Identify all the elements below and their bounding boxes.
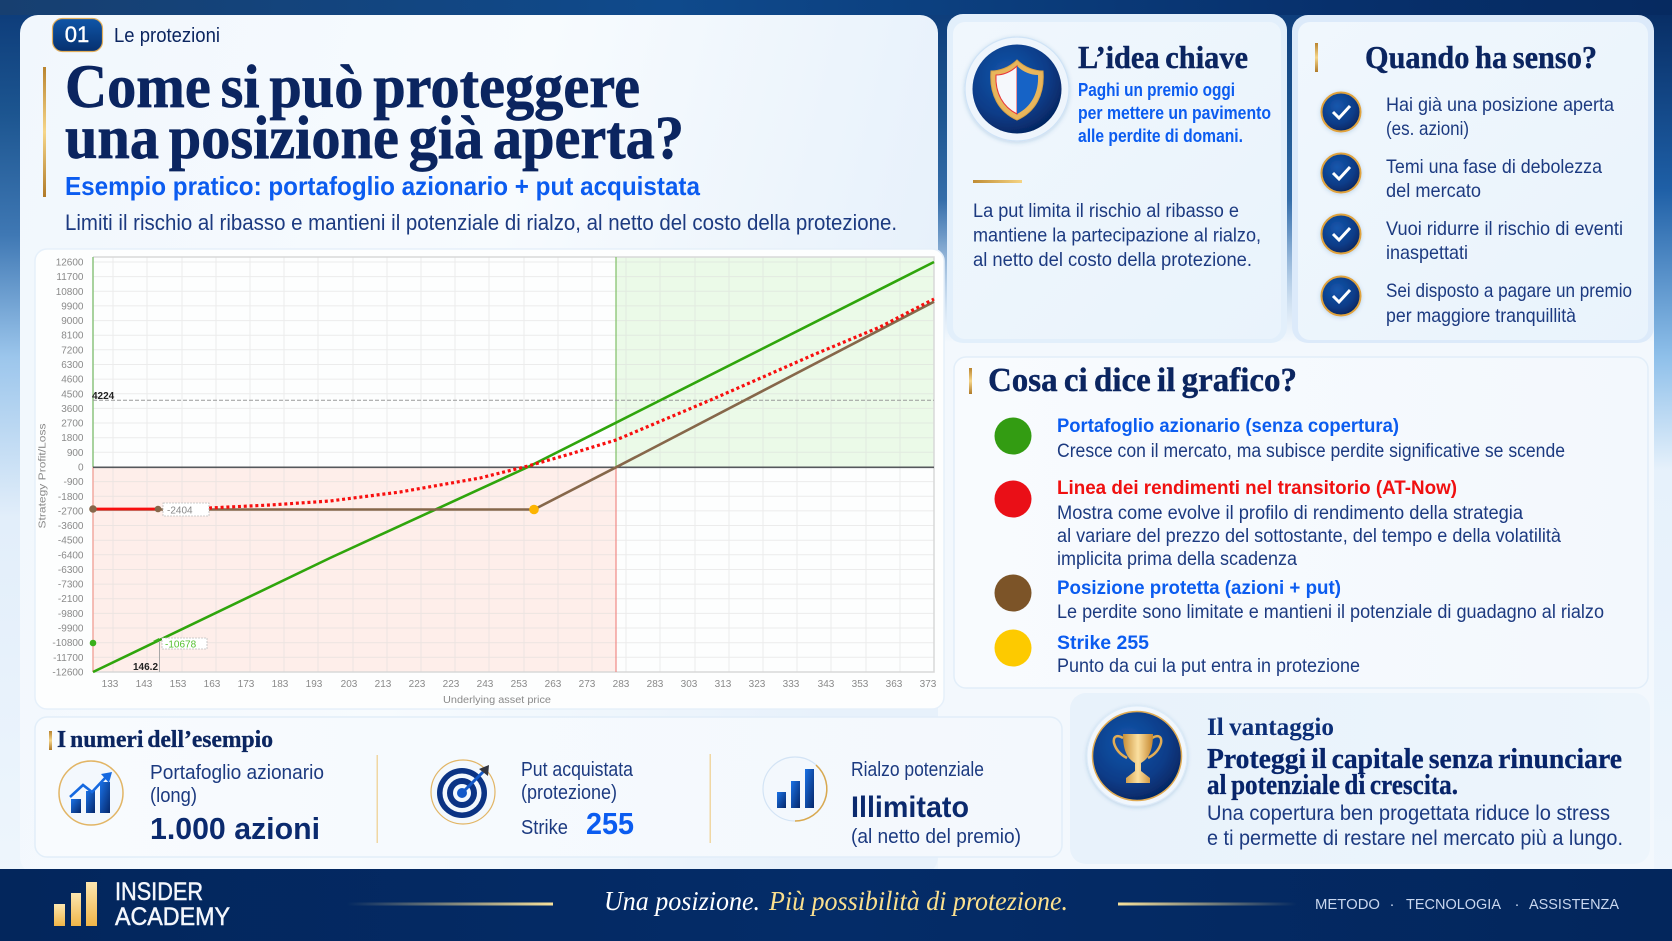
x axis labels: 223 (443, 679, 460, 690)
key message: Paghi un premio oggi (1078, 80, 1235, 100)
marker dots and cursor (89, 505, 161, 672)
x axis labels: 143 (136, 679, 153, 690)
item 2 (1322, 154, 1602, 202)
y axis labels: 1800 (61, 433, 84, 444)
item 4: per maggiore tranquillità (1386, 305, 1576, 327)
footer band (0, 869, 1672, 941)
panel: key idea (947, 14, 1287, 343)
legend: portfolio: Portafoglio azionario (senza copertura) (1057, 415, 1399, 437)
stat: portfolio: Portafoglio azionario (150, 762, 324, 784)
stat: put (521, 759, 634, 841)
x axis labels: 183 (272, 679, 289, 690)
stat: upside: Rialzo potenziale (851, 759, 984, 781)
strike marker (529, 505, 539, 514)
stat: portfolio: (long) (150, 785, 197, 807)
section badge (52, 18, 102, 52)
y axis labels: -2100 (58, 594, 84, 605)
y axis labels: 10800 (56, 287, 84, 298)
profit zone shading (616, 257, 934, 467)
x axis labels: 353 (852, 679, 869, 690)
footer values: · (1514, 896, 1520, 913)
icon: target (431, 760, 495, 824)
explanation: mantiene la partecipazione al rialzo, (973, 226, 1261, 246)
y axis labels: -3600 (58, 521, 84, 532)
legend: protected position (994, 574, 1604, 623)
stat: put: (protezione) (521, 782, 617, 804)
item 3 (1322, 214, 1623, 264)
y axis title: Strategy Profit/Loss (38, 424, 48, 528)
headline message: Proteggi il capitale senza rinunciare (1207, 743, 1622, 775)
logo: ACADEMY (115, 903, 230, 931)
heading: L’idea chiave (1078, 39, 1248, 75)
key message (1078, 80, 1271, 146)
divider (376, 755, 378, 843)
y axis labels: 4600 (61, 375, 84, 386)
panel: hero header (20, 15, 938, 875)
icon: shield (965, 37, 1069, 141)
heading: I numeri dell’esempio (57, 727, 273, 753)
item 4 (1322, 276, 1632, 327)
section label: Le protezioni (114, 25, 220, 47)
x axis labels: 343 (818, 679, 835, 690)
y axis labels: -6300 (58, 565, 84, 576)
stat: put: 255 (586, 806, 634, 841)
x axis labels: 133 (102, 679, 119, 690)
item 2: Temi una fase di debolezza (1386, 156, 1602, 178)
stat: upside (851, 759, 1021, 848)
x axis labels: 163 (204, 679, 221, 690)
y axis labels: -4500 (58, 536, 84, 547)
title: Come si può proteggere (65, 54, 640, 121)
item 4: Sei disposto a pagare un premio (1386, 280, 1632, 302)
legend: portfolio (994, 415, 1565, 462)
value tag: stock (162, 638, 207, 650)
item 2: del mercato (1386, 180, 1481, 202)
y axis labels: 8100 (61, 331, 84, 342)
y axis labels: -2700 (58, 506, 84, 517)
annotation: 4224: 4224 (92, 391, 115, 402)
y axis labels: 0 (78, 462, 84, 474)
x axis labels: 203 (341, 679, 358, 690)
divider (710, 754, 711, 843)
legend: strike: Punto da cui la put entra in protezione (1057, 656, 1360, 677)
y axis labels: 6300 (61, 360, 84, 371)
x axis labels: 243 (477, 679, 494, 690)
logo: INSIDER (115, 878, 203, 906)
footer values: ASSISTENZA (1529, 896, 1619, 913)
line: stock portfolio (93, 262, 934, 672)
supporting text (1207, 802, 1623, 850)
x axis title: Underlying asset price (443, 695, 551, 706)
headline message: al potenziale di crescita. (1207, 769, 1458, 801)
tagline: Una posizione. (604, 886, 760, 916)
x axis labels: 173 (238, 679, 255, 690)
y axis labels: -7300 (58, 580, 84, 591)
x axis labels: 323 (749, 679, 766, 690)
legend: protected position: Posizione protetta (azioni + put) (1057, 577, 1341, 599)
legend: portfolio: Cresce con il mercato, ma subisce perdite significative se scende (1057, 441, 1565, 462)
legend: AT-Now (994, 477, 1561, 570)
y axis labels: -11700 (53, 653, 84, 664)
y axis labels: -10800 (52, 638, 84, 649)
logo (54, 878, 230, 931)
title: una posizione già aperta? (65, 105, 684, 172)
stat: put: Put acquistata (521, 759, 634, 781)
heading: Il vantaggio (1207, 714, 1334, 741)
y axis labels: 9900 (61, 301, 84, 312)
item 3: Vuoi ridurre il rischio di eventi (1386, 218, 1623, 240)
value tag: stock: -10678 (165, 640, 197, 650)
legend: strike: Strike 255 (1057, 632, 1149, 654)
y axis labels: -9800 (58, 609, 84, 620)
x axis labels: 333 (783, 679, 800, 690)
legend: AT-Now: implicita prima della scadenza (1057, 549, 1297, 570)
annotation: 146.2: 146.2 (133, 662, 158, 673)
headline message (1207, 743, 1622, 801)
tagline (604, 886, 1068, 916)
item 1 (1322, 92, 1614, 140)
heading: Cosa ci dice il grafico? (988, 362, 1297, 399)
x axis labels (102, 679, 937, 690)
item 1: (es. azioni) (1386, 118, 1469, 140)
key message: alle perdite di domani. (1078, 126, 1243, 146)
x axis labels: 313 (715, 679, 732, 690)
title accent bar (43, 67, 46, 197)
key message: per mettere un pavimento (1078, 103, 1271, 123)
y axis labels: 4500 (61, 389, 84, 400)
tagline right rule (1118, 902, 1297, 906)
tagline: Più possibilità di protezione. (768, 886, 1068, 916)
stat: upside: (al netto del premio) (851, 826, 1021, 848)
accent bar (49, 731, 52, 750)
stat: portfolio (150, 762, 324, 846)
x axis labels: 283 (613, 679, 630, 690)
panel: payoff chart (35, 249, 944, 709)
icon: trophy (1087, 706, 1187, 806)
panel: chart legend (954, 357, 1648, 688)
explanation: La put limita il rischio al ribasso e (973, 201, 1239, 222)
x axis labels: 223 (409, 679, 426, 690)
item 1: Hai già una posizione aperta (1386, 94, 1614, 116)
y axis labels: -1800 (58, 492, 84, 503)
loss zone shading (93, 467, 616, 672)
section badge: 01 (65, 22, 89, 47)
icon: bars (763, 757, 827, 821)
subtitle: Esempio pratico: portafoglio azionario + put acquistata (65, 171, 700, 201)
x axis labels: 153 (170, 679, 187, 690)
stat: put: Strike (521, 817, 568, 839)
item 3: inaspettati (1386, 242, 1468, 264)
footer values (1315, 896, 1619, 913)
value tag: protected: -2404 (167, 506, 193, 516)
x axis labels: 303 (681, 679, 698, 690)
legend: AT-Now: al variare del prezzo del sottostante, del tempo e della volatilità (1057, 526, 1561, 547)
heading: Quando ha senso? (1365, 39, 1597, 75)
y axis labels: -6400 (58, 550, 84, 561)
legend: AT-Now: Linea dei rendimenti nel transitorio (AT-Now) (1057, 477, 1457, 499)
x axis labels: 213 (375, 679, 392, 690)
footer values: · (1390, 896, 1394, 913)
x axis labels: 193 (306, 679, 323, 690)
gold rule (973, 180, 1022, 183)
explanation: al netto del costo della protezione. (973, 250, 1252, 271)
y axis labels (52, 258, 84, 678)
line: protected position (93, 302, 934, 510)
panel: the advantage (1070, 693, 1650, 864)
value tag: protected (163, 503, 209, 516)
y axis labels: 7200 (61, 345, 84, 356)
x axis labels: 253 (511, 679, 528, 690)
panel: when it makes sense (1292, 15, 1654, 343)
y axis labels: 900 (67, 448, 84, 459)
legend: protected position: Le perdite sono limitate e mantieni il potenziale di guadagno al rialzo (1057, 602, 1604, 623)
supporting text: e ti permette di restare nel mercato più a lungo. (1207, 827, 1623, 850)
title (65, 54, 684, 172)
stat: portfolio: 1.000 azioni (150, 811, 320, 846)
y axis labels: -9900 (58, 624, 84, 634)
x axis labels: 363 (886, 679, 903, 690)
explanation (973, 201, 1261, 271)
y axis labels: 2700 (61, 418, 84, 430)
y axis labels: -900 (63, 477, 84, 488)
x axis labels: 263 (545, 679, 562, 690)
x axis labels: 283 (647, 679, 664, 690)
y axis labels: 9000 (61, 316, 84, 327)
line: AT-Now returns (93, 299, 934, 509)
y axis labels: -12600 (52, 668, 84, 678)
intro sentence: Limiti il rischio al ribasso e mantieni il potenziale di rialzo, al netto del costo della protezione. (65, 210, 897, 235)
panel: example numbers (35, 717, 1062, 857)
stat: upside: Illimitato (851, 791, 969, 824)
y axis labels: 3600 (61, 404, 84, 415)
footer values: TECNOLOGIA (1406, 896, 1501, 913)
accent bar (969, 368, 972, 394)
icon: growth chart (59, 761, 123, 825)
x axis labels: 273 (579, 679, 596, 690)
legend: strike (994, 630, 1360, 677)
supporting text: Una copertura ben progettata riduce lo stress (1207, 802, 1610, 825)
accent bar (1315, 43, 1318, 72)
y axis labels: 12600 (56, 258, 84, 268)
tagline left rule (347, 902, 553, 906)
footer values: METODO (1315, 896, 1380, 913)
x axis labels: 373 (920, 679, 937, 690)
legend: AT-Now: Mostra come evolve il profilo di rendimento della strategia (1057, 503, 1523, 524)
y axis labels: 11700 (56, 272, 84, 283)
